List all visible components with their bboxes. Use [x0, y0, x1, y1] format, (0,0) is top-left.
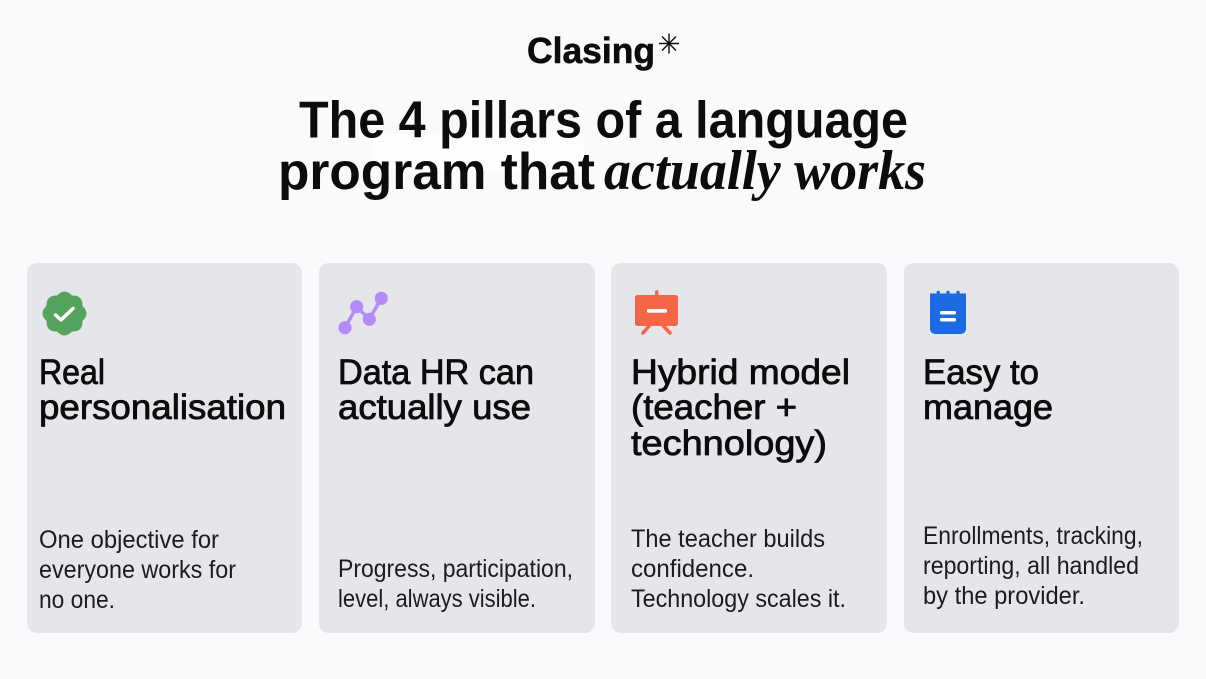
title [278, 92, 926, 202]
body text: no one. [39, 586, 115, 614]
body text [338, 555, 573, 613]
body text [923, 522, 1143, 610]
body text [631, 525, 846, 613]
icon: purple line chart [338, 292, 388, 334]
body text: confidence. [631, 555, 754, 583]
heading [631, 353, 850, 463]
heading [338, 353, 534, 427]
heading: Data HR can [338, 353, 534, 392]
panel: real personalisation [27, 263, 302, 633]
heading: technology) [631, 424, 827, 463]
title: program that [278, 143, 595, 201]
heading [39, 353, 286, 427]
heading [923, 353, 1053, 427]
icon: blue notepad [930, 292, 966, 334]
body text: level, always visible. [338, 585, 536, 613]
heading: Real [39, 353, 105, 392]
body text: everyone works for [39, 556, 236, 584]
icon: green verified badge [42, 292, 86, 336]
title: The 4 pillars of a language [299, 92, 908, 150]
heading: manage [923, 388, 1053, 427]
heading: personalisation [39, 388, 286, 427]
panel: hybrid model [611, 263, 887, 633]
icon: orange presentation board [635, 292, 678, 333]
body text: One objective for [39, 526, 219, 554]
panel: easy to manage [904, 263, 1179, 633]
body text: Progress, participation, [338, 555, 573, 583]
heading: (teacher + [631, 388, 797, 427]
body text: Technology scales it. [631, 585, 846, 613]
body text: by the provider. [923, 582, 1085, 610]
heading: actually use [338, 388, 531, 427]
logo: Clasing: Clasing [527, 30, 655, 71]
title: actually works [604, 140, 926, 202]
body text: reporting, all handled [923, 552, 1139, 580]
body text: Enrollments, tracking, [923, 522, 1143, 550]
heading: Easy to [923, 353, 1039, 392]
heading: Hybrid model [631, 353, 850, 392]
panel: data HR can use [319, 263, 595, 633]
body text [39, 526, 236, 614]
body text: The teacher builds [631, 525, 825, 553]
